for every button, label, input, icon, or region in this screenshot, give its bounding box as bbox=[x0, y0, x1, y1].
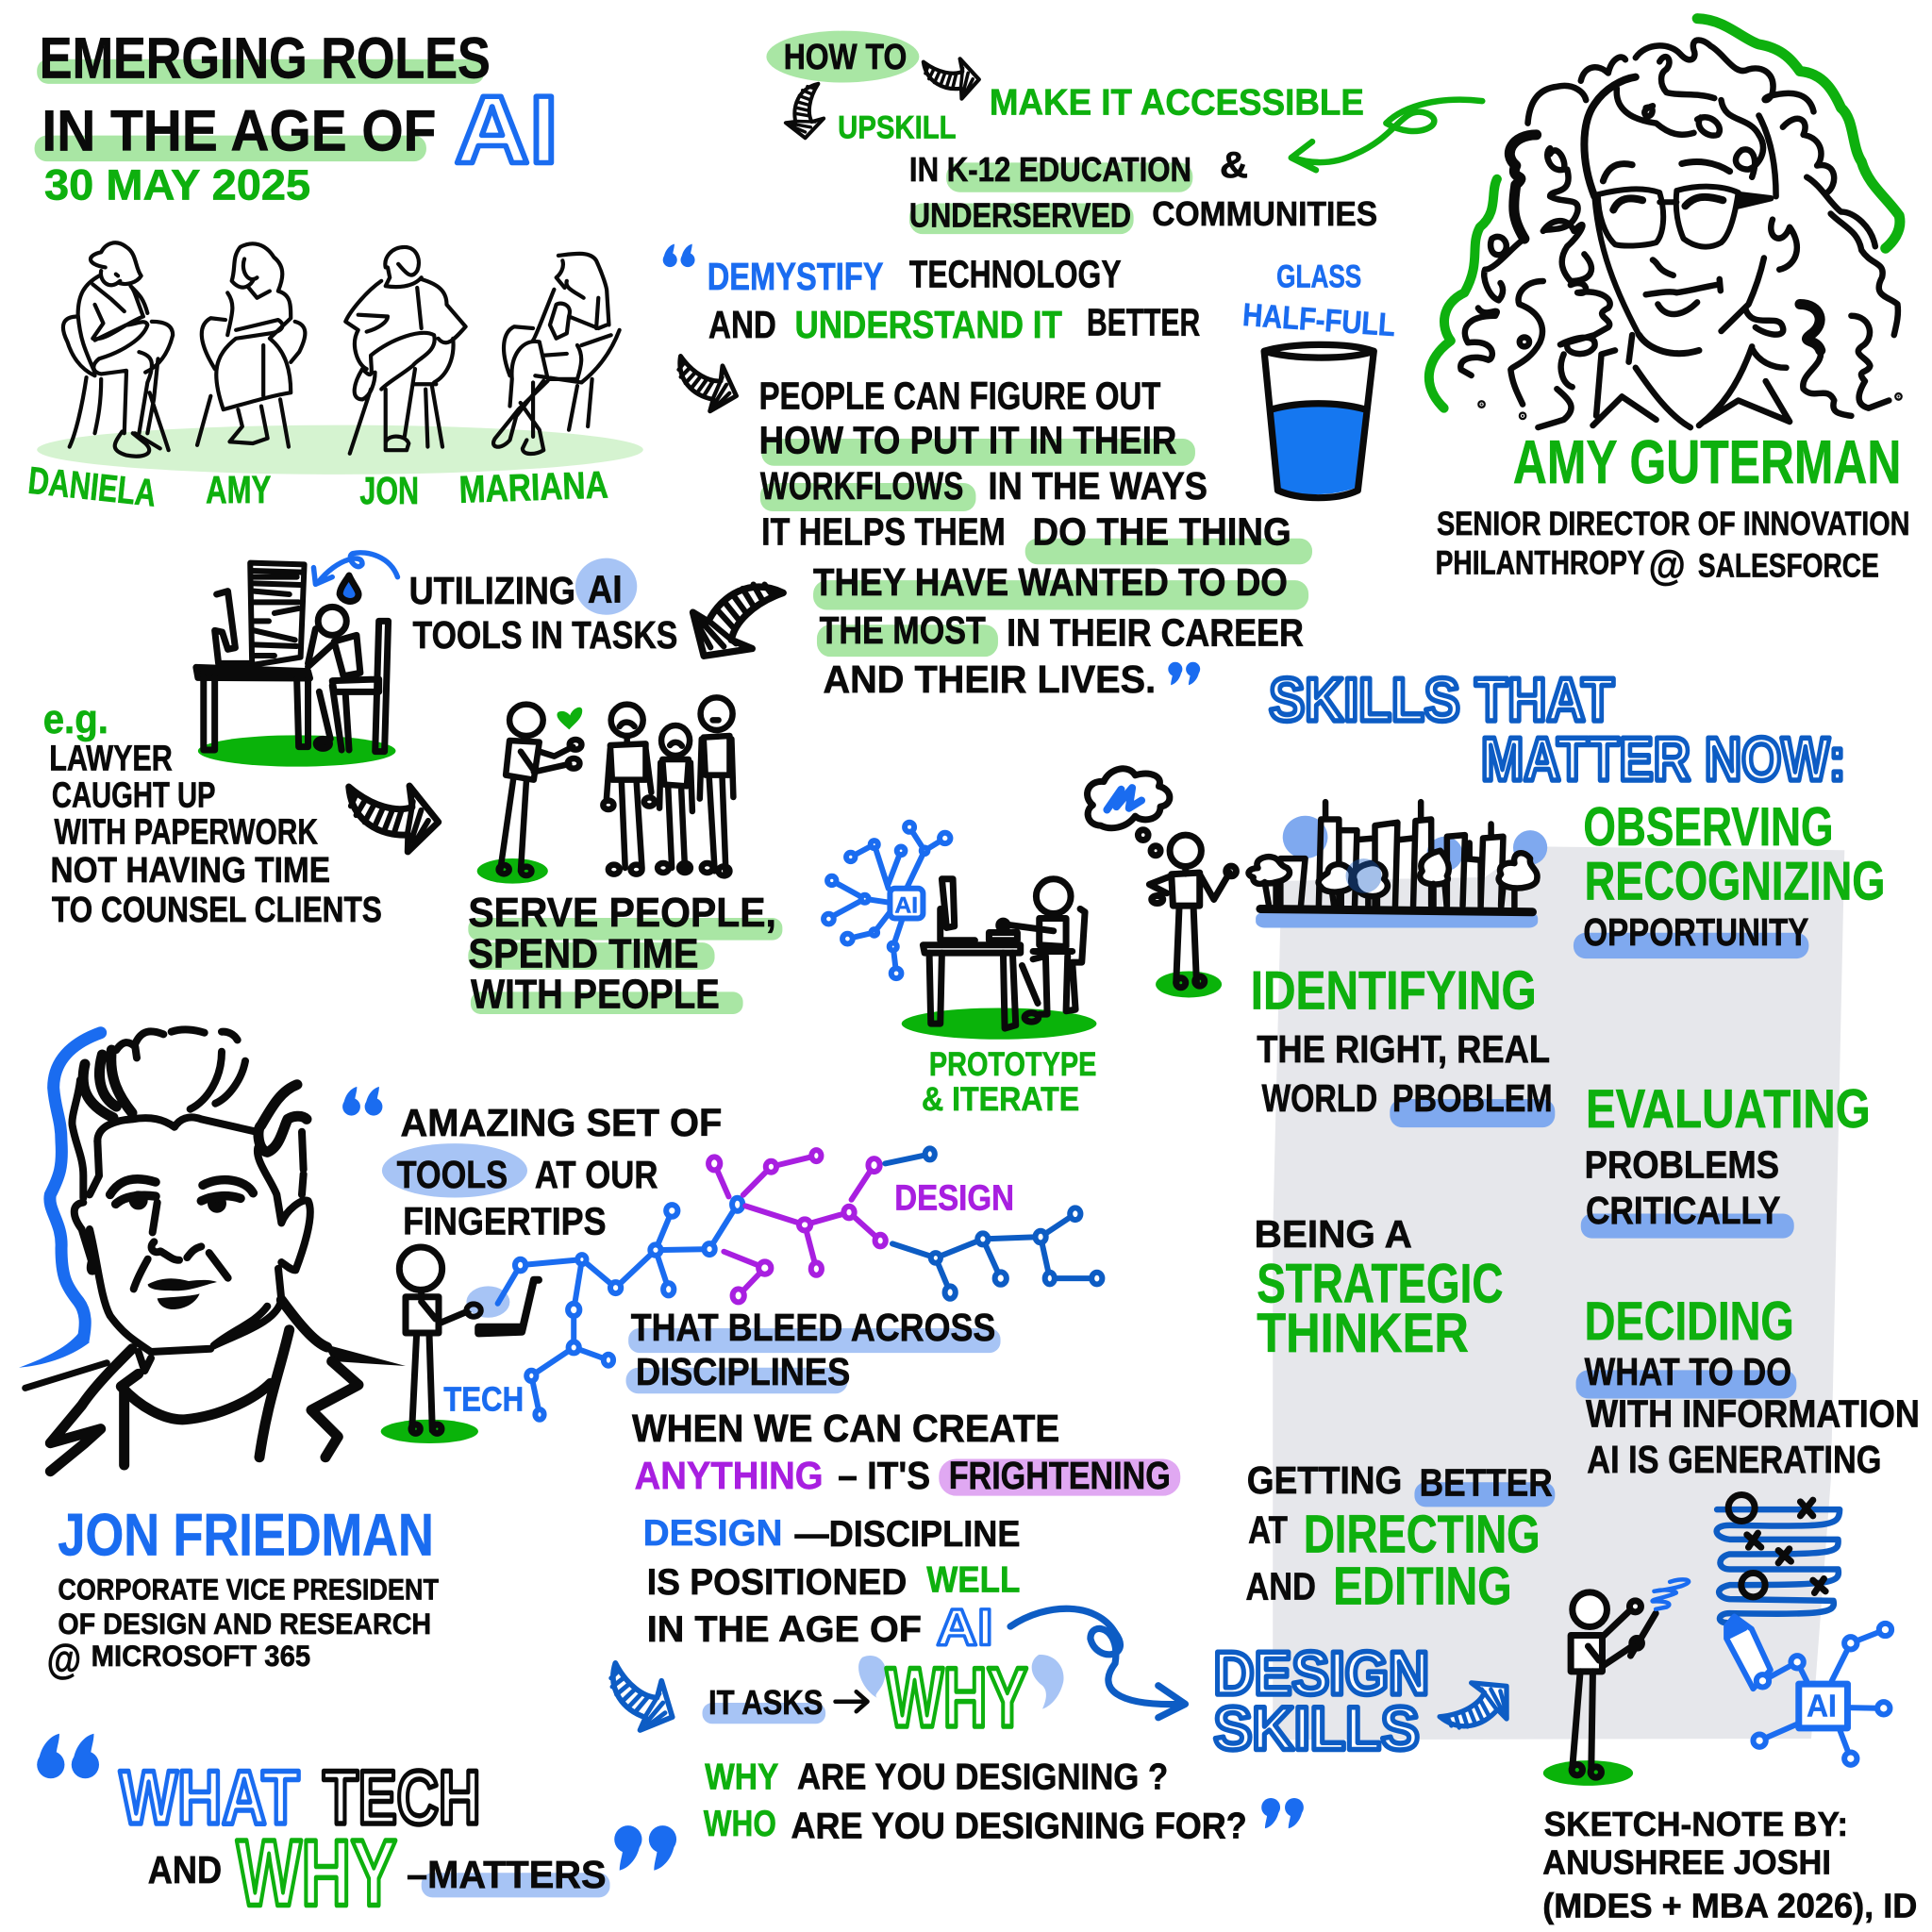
quote: Amy on demystifying technology: IN THE WAYS bbox=[989, 464, 1208, 508]
design skills outlined heading with arrow: SKILLS bbox=[1214, 1694, 1420, 1763]
section: how to upskill: IN K-12 EDUCATION bbox=[909, 150, 1191, 189]
skill: identifying the problem: PBOBLEM bbox=[1392, 1076, 1553, 1120]
panelist names: AMY bbox=[206, 468, 271, 511]
quote: Amy on demystifying technology: THE MOST bbox=[820, 608, 986, 652]
panelist names: DANIELA bbox=[26, 458, 158, 515]
text: design is positioned well bbox=[643, 1513, 1020, 1657]
Jon Friedman name and title: OF DESIGN AND RESEARCH bbox=[58, 1607, 431, 1641]
section: how to upskill: COMMUNITIES bbox=[1152, 194, 1377, 233]
skill: identifying the problem: IDENTIFYING bbox=[1251, 961, 1537, 1022]
skill: evaluating problems: CRITICALLY bbox=[1586, 1189, 1780, 1232]
quote: Amy on demystifying technology: AND THEIR LIVES. bbox=[823, 658, 1156, 701]
section: how to upskill: & bbox=[1220, 145, 1248, 186]
skill: deciding: DECIDING bbox=[1585, 1291, 1794, 1352]
panelist sketches bbox=[63, 242, 620, 457]
quote: Amy on demystifying technology: PEOPLE CAN FIGURE OUT bbox=[759, 375, 1161, 418]
skill: strategic thinker: BEING A bbox=[1255, 1212, 1412, 1256]
quote: Amy on demystifying technology: UNDERSTAND IT bbox=[794, 303, 1062, 346]
quote: what tech and why matters: WHY bbox=[237, 1821, 397, 1925]
credit: sketch-note by: SKETCH-NOTE BY: bbox=[1544, 1805, 1848, 1843]
section: how to upskill bbox=[766, 31, 1482, 234]
text: utilizing AI tools in tasks bbox=[409, 558, 677, 657]
example: lawyer text: CAUGHT UP bbox=[52, 776, 216, 816]
title block: EMERGING ROLES bbox=[40, 25, 491, 91]
icon: glass half full bbox=[1241, 258, 1396, 498]
quote: Jon on tools and disciplines: AMAZING SET OF bbox=[400, 1101, 722, 1144]
text: why and who questions: ARE YOU DESIGNING FOR? bbox=[791, 1807, 1247, 1847]
text: design is positioned well: DESIGN bbox=[643, 1513, 782, 1554]
skill: directing and editing: EDITING bbox=[1333, 1557, 1512, 1616]
figure directing AI on whiteboard: AI bbox=[1807, 1689, 1837, 1724]
skill: evaluating problems: EVALUATING bbox=[1586, 1079, 1871, 1140]
title block: 30 MAY 2025 bbox=[44, 161, 310, 209]
skill: directing and editing: AT bbox=[1248, 1507, 1288, 1551]
text: it asks why: WHY bbox=[886, 1651, 1027, 1744]
quote: Jon on tools and disciplines: THAT BLEED ACROSS bbox=[631, 1306, 995, 1349]
text: when we can create anything: ANYTHING bbox=[635, 1454, 823, 1497]
quote: Amy on demystifying technology: DO THE THING bbox=[1033, 509, 1291, 553]
section: how to upskill: UNDERSERVED bbox=[909, 195, 1131, 234]
credit: sketch-note by: (MDES + MBA 2026), ID bbox=[1542, 1886, 1917, 1924]
text: it asks why bbox=[592, 1651, 1064, 1744]
skill: directing and editing bbox=[1245, 1458, 1555, 1616]
quote: Jon on tools and disciplines: AT OUR bbox=[535, 1153, 658, 1196]
quote: what tech and why matters: –MATTERS bbox=[407, 1853, 607, 1896]
heading: skills that matter now: SKILLS THAT bbox=[1269, 665, 1614, 734]
text: why and who questions: ARE YOU DESIGNING ? bbox=[797, 1757, 1168, 1797]
skill: strategic thinker bbox=[1255, 1212, 1503, 1364]
quote: what tech and why matters bbox=[37, 1734, 676, 1925]
skill: observing / recognizing bbox=[1574, 797, 1885, 958]
Jon Friedman name and title: CORPORATE VICE PRESIDENT bbox=[58, 1573, 439, 1606]
example: lawyer text bbox=[43, 697, 382, 930]
skill: observing / recognizing: OPPORTUNITY bbox=[1583, 910, 1808, 954]
example: lawyer text: WITH PAPERWORK bbox=[54, 813, 318, 853]
skill: deciding: AI IS GENERATING bbox=[1587, 1438, 1881, 1481]
text: serve people: WITH PEOPLE bbox=[471, 972, 720, 1017]
panelist names: MARIANA bbox=[458, 462, 608, 511]
quote: Amy on demystifying technology: THEY HAVE WANTED TO DO bbox=[813, 560, 1288, 604]
AI network and desk: AI bbox=[894, 892, 918, 918]
icon: glass half full: HALF-FULL bbox=[1241, 297, 1396, 343]
labels: tech and design: TECH bbox=[443, 1380, 524, 1419]
quote: what tech and why matters: TECH bbox=[323, 1756, 480, 1840]
text: design is positioned well: —DISCIPLINE bbox=[794, 1514, 1020, 1555]
text: design is positioned well: AI bbox=[937, 1598, 993, 1657]
arrow: striped right bbox=[341, 777, 442, 856]
thinking figure with cloud bbox=[1088, 769, 1236, 997]
curly hair bbox=[1528, 40, 1898, 408]
Amy Guterman name and title: PHILANTHROPY bbox=[1436, 545, 1645, 582]
text: when we can create anything: WHEN WE CAN CREATE bbox=[632, 1407, 1059, 1450]
skill: directing and editing: AND bbox=[1245, 1564, 1316, 1607]
portrait: Amy Guterman bbox=[1429, 19, 1900, 427]
heading: skills that matter now bbox=[1269, 665, 1846, 793]
credit: sketch-note by: ANUSHREE JOSHI bbox=[1542, 1843, 1831, 1882]
quote: Amy on demystifying technology: WORKFLOWS bbox=[760, 464, 963, 508]
text: utilizing AI tools in tasks: UTILIZING bbox=[409, 569, 575, 612]
title block bbox=[35, 25, 558, 209]
city skyline illustration bbox=[1249, 802, 1547, 927]
prototype and iterate scene bbox=[824, 823, 1096, 1118]
quote: Jon on tools and disciplines bbox=[342, 1087, 1001, 1393]
quote: Amy on demystifying technology: BETTER bbox=[1087, 300, 1200, 343]
text: serve people: SPEND TIME bbox=[468, 931, 699, 976]
text: serve people bbox=[468, 891, 782, 1017]
quote: Amy on demystifying technology: DEMYSTIFY bbox=[708, 255, 883, 298]
skill: identifying the problem: WORLD bbox=[1261, 1076, 1377, 1120]
panel: four seated panelists bbox=[26, 242, 643, 515]
Amy Guterman name and title: SALESFORCE bbox=[1698, 547, 1879, 584]
arrow: green curly bbox=[1291, 100, 1482, 170]
Jon Friedman name and title bbox=[47, 1502, 439, 1683]
text: why and who questions bbox=[704, 1757, 1304, 1847]
skill: evaluating problems bbox=[1581, 1079, 1871, 1239]
section: how to upskill: HOW TO bbox=[784, 38, 907, 77]
quote: Amy on demystifying technology: HOW TO PUT IT IN THEIR bbox=[759, 419, 1176, 462]
skill: identifying the problem: THE RIGHT, REAL bbox=[1257, 1027, 1550, 1071]
heading: skills that matter now: MATTER NOW: bbox=[1481, 724, 1846, 793]
skill: deciding: WHAT TO DO bbox=[1585, 1350, 1791, 1393]
section: how to upskill: MAKE IT ACCESSIBLE bbox=[990, 82, 1364, 123]
text: why and who questions: WHY bbox=[705, 1757, 778, 1797]
text: utilizing AI tools in tasks: TOOLS IN TASKS bbox=[413, 613, 677, 657]
Amy Guterman name and title bbox=[1436, 427, 1909, 589]
quote: what tech and why matters: WHAT bbox=[120, 1756, 299, 1840]
text: serve people: SERVE PEOPLE, bbox=[468, 891, 776, 936]
text: when we can create anything: – IT'S bbox=[838, 1454, 930, 1497]
Jon Friedman name and title: MICROSOFT 365 bbox=[92, 1640, 310, 1673]
quote: Amy on demystifying technology: TECHNOLOGY bbox=[909, 252, 1122, 295]
text: when we can create anything bbox=[632, 1407, 1180, 1497]
text: design is positioned well: WELL bbox=[926, 1560, 1020, 1601]
example: lawyer text: TO COUNSEL CLIENTS bbox=[52, 891, 382, 930]
title block: IN THE AGE OF bbox=[42, 98, 436, 163]
quote: Amy on demystifying technology: IT HELPS THEM bbox=[761, 509, 1006, 553]
section: how to upskill: UPSKILL bbox=[838, 109, 957, 145]
text: when we can create anything: FRIGHTENING bbox=[949, 1454, 1171, 1497]
prototype and iterate scene: & ITERATE bbox=[922, 1081, 1079, 1118]
skill: directing and editing: DIRECTING bbox=[1304, 1505, 1541, 1564]
skill: directing and editing: BETTER bbox=[1420, 1461, 1553, 1505]
design skills outlined heading with arrow: DESIGN bbox=[1214, 1639, 1429, 1707]
labels: tech and design: DESIGN bbox=[894, 1179, 1014, 1219]
credit: sketch-note by bbox=[1542, 1805, 1917, 1924]
example: lawyer text: LAWYER bbox=[49, 739, 173, 778]
quote: what tech and why matters: AND bbox=[148, 1848, 222, 1891]
panelist names: JON bbox=[359, 469, 419, 512]
panel: gray skills background bbox=[1273, 846, 1844, 1740]
skill: deciding bbox=[1576, 1291, 1920, 1481]
example: lawyer text: NOT HAVING TIME bbox=[51, 851, 330, 891]
text: it asks why: IT ASKS bbox=[708, 1683, 823, 1722]
figure directing AI on whiteboard bbox=[1543, 1494, 1891, 1786]
design skills outlined heading with arrow bbox=[1214, 1639, 1523, 1763]
skill: strategic thinker: STRATEGIC bbox=[1257, 1254, 1503, 1315]
Jon Friedman name and title: @ bbox=[47, 1638, 81, 1683]
Jon Friedman name and title: JON FRIEDMAN bbox=[58, 1502, 434, 1568]
desk worker overwhelmed with paperwork bbox=[196, 553, 397, 767]
text: design is positioned well: IS POSITIONED bbox=[647, 1562, 907, 1603]
portrait: Jon Friedman bbox=[19, 1029, 406, 1472]
skill: strategic thinker: THINKER bbox=[1257, 1303, 1469, 1364]
skill tree: tech and design branches bbox=[466, 1148, 1102, 1420]
icon: glass half full: GLASS bbox=[1276, 258, 1361, 294]
text: why and who questions: WHO bbox=[704, 1804, 776, 1844]
quote: Amy on demystifying technology: AND bbox=[708, 303, 776, 346]
arrow: large striped pointing down-left bbox=[676, 557, 791, 676]
skill: identifying the problem bbox=[1251, 961, 1555, 1127]
prototype and iterate scene: PROTOTYPE bbox=[929, 1046, 1096, 1083]
labels: tech and design bbox=[443, 1179, 1014, 1419]
Amy Guterman name and title: @ bbox=[1649, 543, 1686, 589]
skill: evaluating problems: PROBLEMS bbox=[1585, 1143, 1779, 1187]
quote: Amy on demystifying technology: IN THEIR CAREER bbox=[1007, 610, 1304, 654]
text: utilizing AI tools in tasks: AI bbox=[588, 568, 623, 611]
skill: observing / recognizing: OBSERVING bbox=[1583, 797, 1834, 858]
title block: AI bbox=[455, 75, 558, 183]
panelist names bbox=[26, 458, 608, 515]
quote: Jon on tools and disciplines: TOOLS bbox=[397, 1153, 508, 1196]
example: lawyer text: e.g. bbox=[43, 697, 108, 742]
quote: Amy on demystifying technology bbox=[663, 244, 1312, 701]
arrow: blue curly to design skills bbox=[1010, 1608, 1185, 1718]
quote: Jon on tools and disciplines: FINGERTIPS bbox=[403, 1200, 607, 1243]
figure with laptop bbox=[381, 1247, 478, 1443]
skill: directing and editing: GETTING bbox=[1247, 1458, 1402, 1502]
quote: Jon on tools and disciplines: DISCIPLINES bbox=[636, 1350, 850, 1393]
text: design is positioned well: IN THE AGE OF bbox=[647, 1609, 922, 1650]
serving people figures bbox=[477, 697, 733, 884]
AI network and desk bbox=[824, 823, 1096, 1040]
